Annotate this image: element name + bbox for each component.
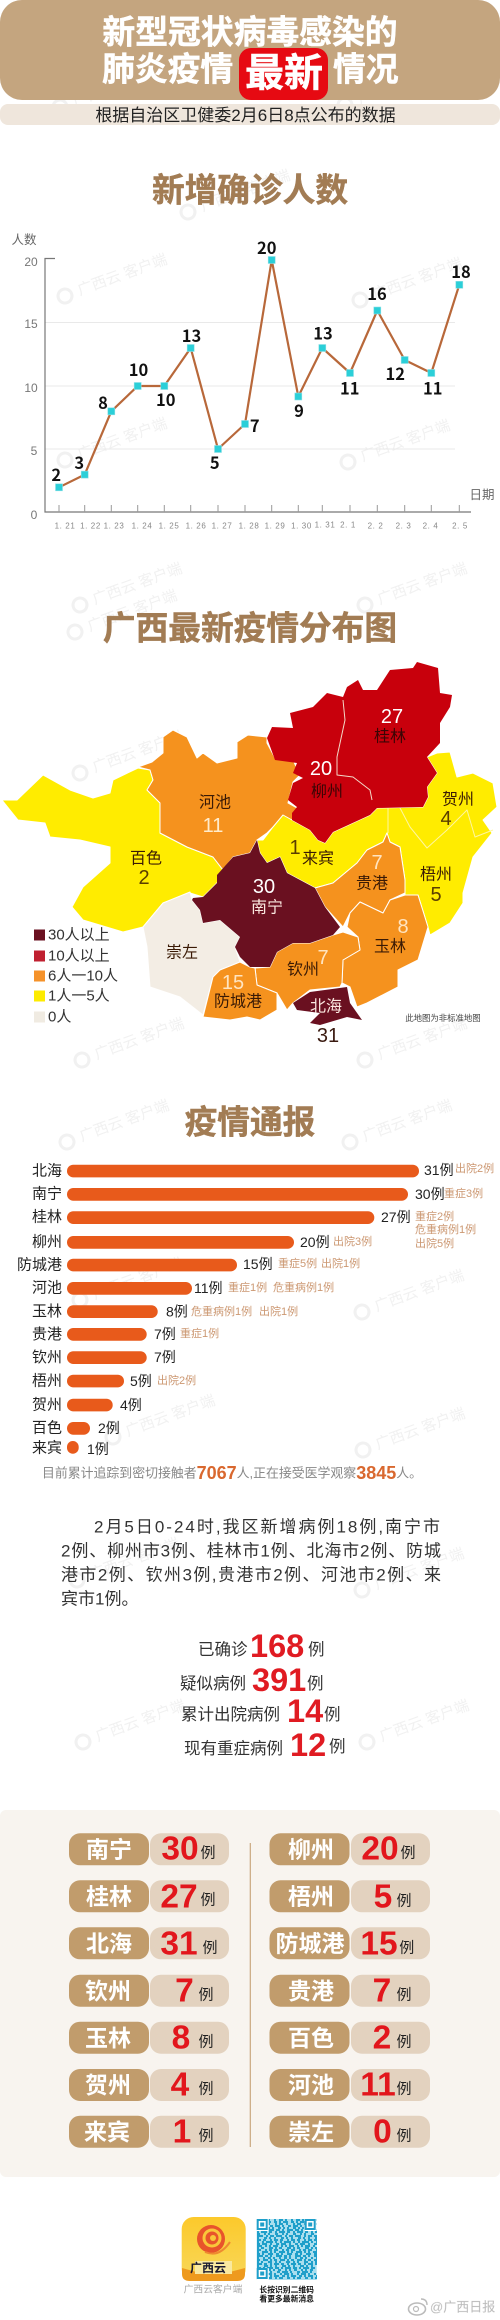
y axis title: 人数 xyxy=(11,232,37,247)
bar row: Yulin: 危重病例1例 xyxy=(191,1304,252,1318)
pill: Liuzhou xyxy=(270,1830,430,1868)
pill: Hezhou: 贺州 xyxy=(85,2072,131,2098)
pill: Beihai xyxy=(69,1926,229,1962)
watermarks: 广西云 客户端 xyxy=(360,1097,455,1145)
subtitle bar: 根据自治区卫健委2月6日8点公布的数据 xyxy=(95,106,396,125)
data markers xyxy=(56,256,463,491)
watermarks: 广西云 客户端 xyxy=(375,1015,470,1063)
bar row: Qinzhou: 7例 xyxy=(154,1349,176,1365)
map labels: 7 xyxy=(317,947,329,969)
pill: Nanning: 南宁 xyxy=(86,1836,132,1862)
map labels: 北海 xyxy=(310,998,342,1016)
pill: Beihai: 北海 xyxy=(86,1930,132,1956)
pill: Nanning xyxy=(69,1830,229,1868)
subtitle bar xyxy=(0,104,500,125)
pill: Baise: 2 xyxy=(373,2020,391,2056)
data labels: 5 xyxy=(210,450,220,474)
x axis date labels: 1. 30 xyxy=(291,522,312,530)
map labels: 11 xyxy=(203,815,223,837)
pill: Qinzhou xyxy=(69,1972,229,2010)
data labels: 8 xyxy=(98,390,108,414)
bar row: Laibin: 来宾 xyxy=(32,1440,62,1456)
region: Guilin and Liuzhou xyxy=(267,662,452,843)
pill: Yulin: 例 xyxy=(198,2034,214,2050)
data labels: 20 xyxy=(257,235,276,259)
bar row: Yulin xyxy=(32,1303,298,1320)
watermarks: 广西云 客户端 xyxy=(373,1405,468,1453)
pill: Guilin: 桂林 xyxy=(86,1884,132,1910)
map labels: 防城港 xyxy=(214,992,262,1010)
bar row: Liuzhou: 20例 xyxy=(300,1234,330,1250)
bar row: Yulin: 玉林 xyxy=(32,1303,62,1320)
x axis date labels: 2. 1 xyxy=(340,520,356,530)
stat: discharged: 累计出院病例 xyxy=(181,1705,280,1724)
region: Guigang xyxy=(315,833,405,927)
map labels: 钦州 xyxy=(287,960,319,978)
watermarks: 广西云 客户端 xyxy=(375,560,470,608)
bar row: Beihai xyxy=(32,1161,494,1180)
data labels: 13 xyxy=(182,323,201,347)
pill: Baise: 百色 xyxy=(288,2025,334,2051)
heading: new cases: 新增确诊人数 xyxy=(152,172,348,208)
stat: suspected xyxy=(180,1662,324,1698)
map labels: 7 xyxy=(371,852,383,874)
map labels: 2 xyxy=(138,867,150,889)
QR caption: 长按识别二维码 xyxy=(259,2284,314,2294)
pill: Guigang: 7 xyxy=(373,1972,391,2010)
data labels: 11 xyxy=(423,376,442,400)
heading: bulletin: 疫情通报 xyxy=(185,1104,315,1140)
bar row: Fangchenggang: 防城港 xyxy=(17,1256,62,1274)
pill: Wuzhou xyxy=(270,1878,430,1916)
pill: Yulin: 玉林 xyxy=(85,2025,131,2051)
watermarks: 广西云 客户端 xyxy=(85,587,180,635)
pill: Chongzuo: 崇左 xyxy=(288,2119,334,2145)
map labels: 贵港 xyxy=(356,874,388,892)
watermarks: 广西云 客户端 xyxy=(90,560,185,608)
watermarks: 广西云 客户端 xyxy=(372,1545,467,1593)
x axis date labels: 2. 3 xyxy=(396,522,411,530)
x axis date labels: 2. 4 xyxy=(423,522,438,530)
bar row: Baise: 百色 xyxy=(32,1420,62,1436)
app logo xyxy=(182,2217,246,2281)
pill: Fangchenggang xyxy=(270,1926,430,1962)
stat: suspected: 疑似病例 xyxy=(180,1674,246,1693)
region: Fangchenggang xyxy=(203,962,277,1020)
bar row: Fangchenggang: 重症5例 xyxy=(278,1256,317,1270)
region: Qinzhou xyxy=(255,932,360,1010)
title line 2 left: 肺炎疫情 xyxy=(102,50,233,88)
daily report paragraph xyxy=(61,1518,441,1608)
bar row: Nanning: 重症3例 xyxy=(444,1186,483,1200)
watermarks: 广西云 客户端 xyxy=(198,167,293,215)
map labels: 30 xyxy=(253,876,275,898)
pill: Liuzhou: 20 xyxy=(361,1830,399,1868)
stat: suspected: 例 xyxy=(307,1674,324,1693)
region: Nanning xyxy=(192,840,340,967)
watermarks: 广西云 客户端 xyxy=(355,60,450,108)
map of Guangxi xyxy=(2,662,497,1047)
title line 1: 新型冠状病毒感染的 xyxy=(102,14,398,50)
data labels: 7 xyxy=(250,413,260,437)
stat: severe: 现有重症病例 xyxy=(184,1739,283,1758)
bar row: Fangchenggang xyxy=(17,1256,360,1274)
map labels: 梧州 xyxy=(420,866,452,884)
x axis date labels: 1. 21 xyxy=(55,522,75,530)
red highlight box: 最新 xyxy=(245,52,323,96)
panel: city totals xyxy=(0,1810,500,2177)
pill: Fangchenggang: 例 xyxy=(399,1940,414,1956)
pill: Guigang: 贵港 xyxy=(288,1978,334,2004)
stat: confirmed: 例 xyxy=(308,1640,324,1659)
bar row: Hezhou xyxy=(32,1396,142,1414)
bar row: Guigang xyxy=(32,1326,219,1343)
pill: Baise: 例 xyxy=(396,2034,412,2050)
map labels: 河池 xyxy=(199,794,231,812)
pill: Guilin: 27 xyxy=(160,1878,198,1916)
map labels xyxy=(130,706,474,1047)
x axis date labels: 1. 27 xyxy=(212,522,232,530)
bar row: Nanning: 南宁 xyxy=(32,1186,62,1202)
stat: severe: 12 xyxy=(290,1727,326,1763)
pill: Chongzuo: 例 xyxy=(396,2128,412,2144)
map legend: 30人以上 xyxy=(48,926,110,944)
bar row: Laibin xyxy=(32,1440,109,1457)
stat: confirmed: 已确诊 xyxy=(198,1640,248,1659)
data labels: 10 xyxy=(129,357,148,381)
pill: Guilin xyxy=(69,1878,229,1916)
x axis title: 日期 xyxy=(469,488,495,502)
stat: confirmed: 168 xyxy=(250,1628,304,1664)
watermarks: 广西云 客户端 xyxy=(372,1267,467,1315)
bar row: Qinzhou: 钦州 xyxy=(32,1349,62,1366)
bar row: Guilin: 出院5例 xyxy=(415,1236,454,1250)
pill: Laibin xyxy=(69,2114,229,2150)
pill: Hechi: 河池 xyxy=(288,2072,334,2098)
bar row: Guilin xyxy=(32,1208,476,1250)
title banner xyxy=(0,0,500,100)
bar row: Yulin: 8例 xyxy=(166,1304,188,1320)
pill: Fangchenggang: 15 xyxy=(360,1926,398,1962)
bar row: Hechi: 危重病例1例 xyxy=(273,1280,334,1294)
x axis date labels: 1. 26 xyxy=(186,522,206,530)
map legend: 10人以上 xyxy=(48,948,110,964)
stat: confirmed xyxy=(198,1628,324,1664)
QR code xyxy=(257,2219,317,2280)
region: Hechi xyxy=(138,730,300,870)
pill: Liuzhou: 例 xyxy=(400,1844,416,1862)
data labels: 2 xyxy=(51,462,61,486)
QR caption: 看更多最新消息 xyxy=(259,2294,314,2304)
bar row: Laibin: 1例 xyxy=(87,1441,109,1457)
map labels: 百色 xyxy=(130,850,162,868)
bar row: Wuzhou xyxy=(32,1372,196,1390)
bar row: Yulin: 出院1例 xyxy=(259,1304,298,1318)
watermarks: 广西云 客户端 xyxy=(77,1097,172,1145)
watermarks: 广西云 客户端 xyxy=(87,1535,182,1583)
data labels: 10 xyxy=(156,387,175,411)
weibo watermark: @广西日报 xyxy=(430,2300,495,2314)
pill: Baise xyxy=(270,2020,430,2056)
region: Baise xyxy=(2,768,223,932)
bar row: Guigang: 贵港 xyxy=(32,1326,62,1343)
map labels: 玉林 xyxy=(374,938,406,956)
map labels: 崇左 xyxy=(166,944,198,962)
map labels: 来宾 xyxy=(302,850,334,868)
pill: Liuzhou: 柳州 xyxy=(288,1836,334,1862)
bar row: Wuzhou: 出院2例 xyxy=(157,1373,196,1387)
bar row: Liuzhou: 柳州 xyxy=(32,1234,62,1250)
x axis date labels: 1. 24 xyxy=(132,522,152,530)
map labels: 柳州 xyxy=(311,782,343,800)
map labels: 4 xyxy=(440,808,452,830)
bar row: Baise xyxy=(32,1420,120,1436)
bar row: Wuzhou: 梧州 xyxy=(32,1372,62,1390)
pill: Guigang: 例 xyxy=(396,1986,412,2004)
pill: Qinzhou: 7 xyxy=(175,1972,194,2010)
stat: discharged: 例 xyxy=(324,1705,340,1724)
y axis labels: 20 xyxy=(24,255,38,269)
x axis date labels: 2. 2 xyxy=(368,522,383,530)
daily report paragraph: 宾市1例。 xyxy=(61,1590,138,1608)
map labels: 桂林 xyxy=(374,728,406,746)
pill: Laibin: 例 xyxy=(198,2128,214,2144)
region: Beihai xyxy=(293,987,362,1025)
bar row: Fangchenggang: 出院1例 xyxy=(321,1256,360,1270)
watermarks: 广西云 客户端 xyxy=(90,1255,185,1303)
pill: Hechi xyxy=(270,2066,430,2104)
map legend: 0人 xyxy=(48,1008,71,1026)
bar row: Hezhou: 贺州 xyxy=(32,1396,62,1414)
map legend: 6人一10人 xyxy=(48,968,118,984)
pill: Nanning: 30 xyxy=(161,1830,199,1868)
data labels: 18 xyxy=(451,259,471,283)
pill: Hezhou xyxy=(69,2066,229,2104)
watermarks: 广西云 客户端 xyxy=(75,251,170,299)
close contacts note: 目前累计追踪到密切接触者7067人,正在接受医学观察3845人。 xyxy=(42,1463,422,1483)
x axis date labels: 1. 25 xyxy=(159,522,179,530)
map labels: 贺州 xyxy=(442,790,474,808)
bar row: Guilin: 重症2例 xyxy=(415,1209,454,1223)
data labels: 13 xyxy=(313,321,333,345)
pill: Hezhou: 例 xyxy=(198,2080,214,2098)
x axis date labels: 1. 31 xyxy=(315,520,335,530)
bar row: Hechi: 重症1例 xyxy=(228,1280,267,1294)
map disclaimer: 此地图为非标准地图 xyxy=(405,1013,481,1023)
x axis date labels: 2. 5 xyxy=(452,522,468,530)
y axis labels: 10 xyxy=(24,381,38,395)
pill: Beihai: 例 xyxy=(202,1940,218,1956)
heading: map: 广西最新疫情分布图 xyxy=(103,610,397,646)
data line xyxy=(59,260,459,487)
map legend: 1人一5人 xyxy=(48,988,110,1004)
watermarks: 广西云 客户端 xyxy=(92,1015,187,1063)
daily report paragraph: 港市2例、钦州3例,贵港市2例、河池市2例、来 xyxy=(61,1566,441,1584)
pill: Guigang xyxy=(270,1972,430,2010)
bar row: Wuzhou: 5例 xyxy=(130,1373,152,1389)
pill: Qinzhou: 钦州 xyxy=(85,1978,131,2004)
pill: Hechi: 例 xyxy=(396,2080,412,2098)
bar row: Beihai: 31例 xyxy=(424,1162,454,1178)
bar row: Guilin: 危重病例1例 xyxy=(415,1222,476,1236)
bar row: Liuzhou: 出院3例 xyxy=(333,1234,372,1248)
pill: Fangchenggang: 防城港 xyxy=(276,1930,344,1956)
bar row: Guilin: 27例 xyxy=(381,1209,411,1225)
data labels: 11 xyxy=(340,376,359,400)
region: Chongzuo xyxy=(143,892,240,1015)
watermarks: 广西云 客户端 xyxy=(370,255,465,303)
bar row: Hechi xyxy=(32,1280,334,1296)
QR caption xyxy=(259,2284,314,2304)
data labels: 12 xyxy=(386,361,405,385)
map labels: 31 xyxy=(317,1025,339,1047)
pill: Beihai: 31 xyxy=(160,1926,198,1962)
watermarks: 广西云 客户端 xyxy=(377,1697,472,1745)
x axis date labels: 1. 23 xyxy=(104,522,124,530)
y axis labels: 5 xyxy=(31,444,38,458)
stat: severe: 例 xyxy=(329,1737,346,1756)
map labels: 1 xyxy=(289,837,301,859)
x axis date labels: 1. 29 xyxy=(265,522,285,530)
data labels xyxy=(51,235,471,486)
app logo: 广西云 xyxy=(190,2260,226,2275)
watermarks: 广西云 客户端 xyxy=(70,62,165,110)
bar row: Hechi: 河池 xyxy=(32,1280,62,1296)
pill: Chongzuo xyxy=(270,2114,430,2150)
map labels: 5 xyxy=(430,884,442,906)
bar row: Qinzhou xyxy=(32,1349,176,1366)
pill: Laibin: 来宾 xyxy=(84,2119,130,2145)
map labels: 27 xyxy=(381,706,403,728)
watermarks xyxy=(51,60,472,1752)
bar row: Guigang: 7例 xyxy=(154,1326,176,1342)
y axis labels xyxy=(24,255,38,522)
pill: Guilin: 例 xyxy=(200,1892,216,1908)
y axis labels: 0 xyxy=(31,508,38,522)
pill: Wuzhou: 5 xyxy=(374,1878,392,1916)
daily report paragraph: 2月5日0-24时,我区新增病例18例,南宁市 xyxy=(94,1518,440,1536)
bar row: Beihai: 出院2例 xyxy=(455,1161,494,1175)
x axis date labels: 1. 22 xyxy=(80,522,101,530)
pill: Wuzhou: 例 xyxy=(396,1892,412,1910)
data labels: 16 xyxy=(367,281,387,305)
x axis date labels xyxy=(55,520,468,530)
region: Laibin, Hezhou, Wuzhou xyxy=(257,752,497,935)
watermarks: 广西云 客户端 xyxy=(123,1392,218,1440)
title line 2 right: 情况 xyxy=(333,50,399,88)
region: Yulin xyxy=(342,895,428,1007)
bar row: Hezhou: 4例 xyxy=(120,1397,142,1413)
pill: Yulin xyxy=(69,2020,229,2056)
map labels: 15 xyxy=(222,972,244,994)
data labels: 3 xyxy=(74,450,84,474)
x axis date labels: 1. 28 xyxy=(239,522,259,530)
bar row: Fangchenggang: 15例 xyxy=(243,1256,273,1272)
logo caption: 广西云客户端 xyxy=(184,2282,243,2296)
pill: Yulin: 8 xyxy=(172,2020,190,2056)
y axis labels: 15 xyxy=(24,317,38,331)
stat: discharged: 14 xyxy=(287,1693,323,1729)
daily report paragraph: 2例、柳州市3例、桂林市1例、北海市2例、防城 xyxy=(61,1542,441,1560)
bar row: Nanning xyxy=(32,1186,483,1202)
stat: suspected: 391 xyxy=(252,1662,306,1698)
watermarks: 广西云 客户端 xyxy=(358,417,453,465)
map labels: 南宁 xyxy=(251,898,283,916)
watermarks: 广西云 客户端 xyxy=(90,728,185,776)
stat: discharged xyxy=(181,1693,340,1729)
map labels: 20 xyxy=(310,758,332,780)
stat: severe xyxy=(184,1727,346,1763)
pill: Qinzhou: 例 xyxy=(198,1986,214,2004)
pill: Laibin: 1 xyxy=(173,2114,191,2150)
key statistics xyxy=(180,1628,346,1763)
data labels: 9 xyxy=(294,398,304,422)
line chart xyxy=(11,232,495,530)
bar row: Guigang: 重症1例 xyxy=(180,1326,219,1340)
watermarks: 广西云 客户端 xyxy=(93,1697,188,1745)
pill: Hechi: 11 xyxy=(360,2066,396,2104)
bar row: Hechi: 11例 xyxy=(194,1280,223,1296)
map legend xyxy=(34,926,118,1026)
pill: Chongzuo: 0 xyxy=(373,2114,392,2150)
map labels: 8 xyxy=(397,916,409,938)
bar chart: cases by city xyxy=(17,1161,494,1457)
bar row: Beihai: 北海 xyxy=(32,1162,62,1180)
pill: Hezhou: 4 xyxy=(171,2066,190,2104)
bar row: Guilin: 桂林 xyxy=(32,1208,62,1226)
bar row: Liuzhou xyxy=(32,1234,372,1250)
pill: Wuzhou: 梧州 xyxy=(288,1884,334,1910)
bar row: Nanning: 30例 xyxy=(415,1186,445,1202)
pill: Nanning: 例 xyxy=(200,1844,216,1862)
watermarks: 广西云 客户端 xyxy=(75,415,170,463)
bar row: Baise: 2例 xyxy=(98,1420,120,1436)
